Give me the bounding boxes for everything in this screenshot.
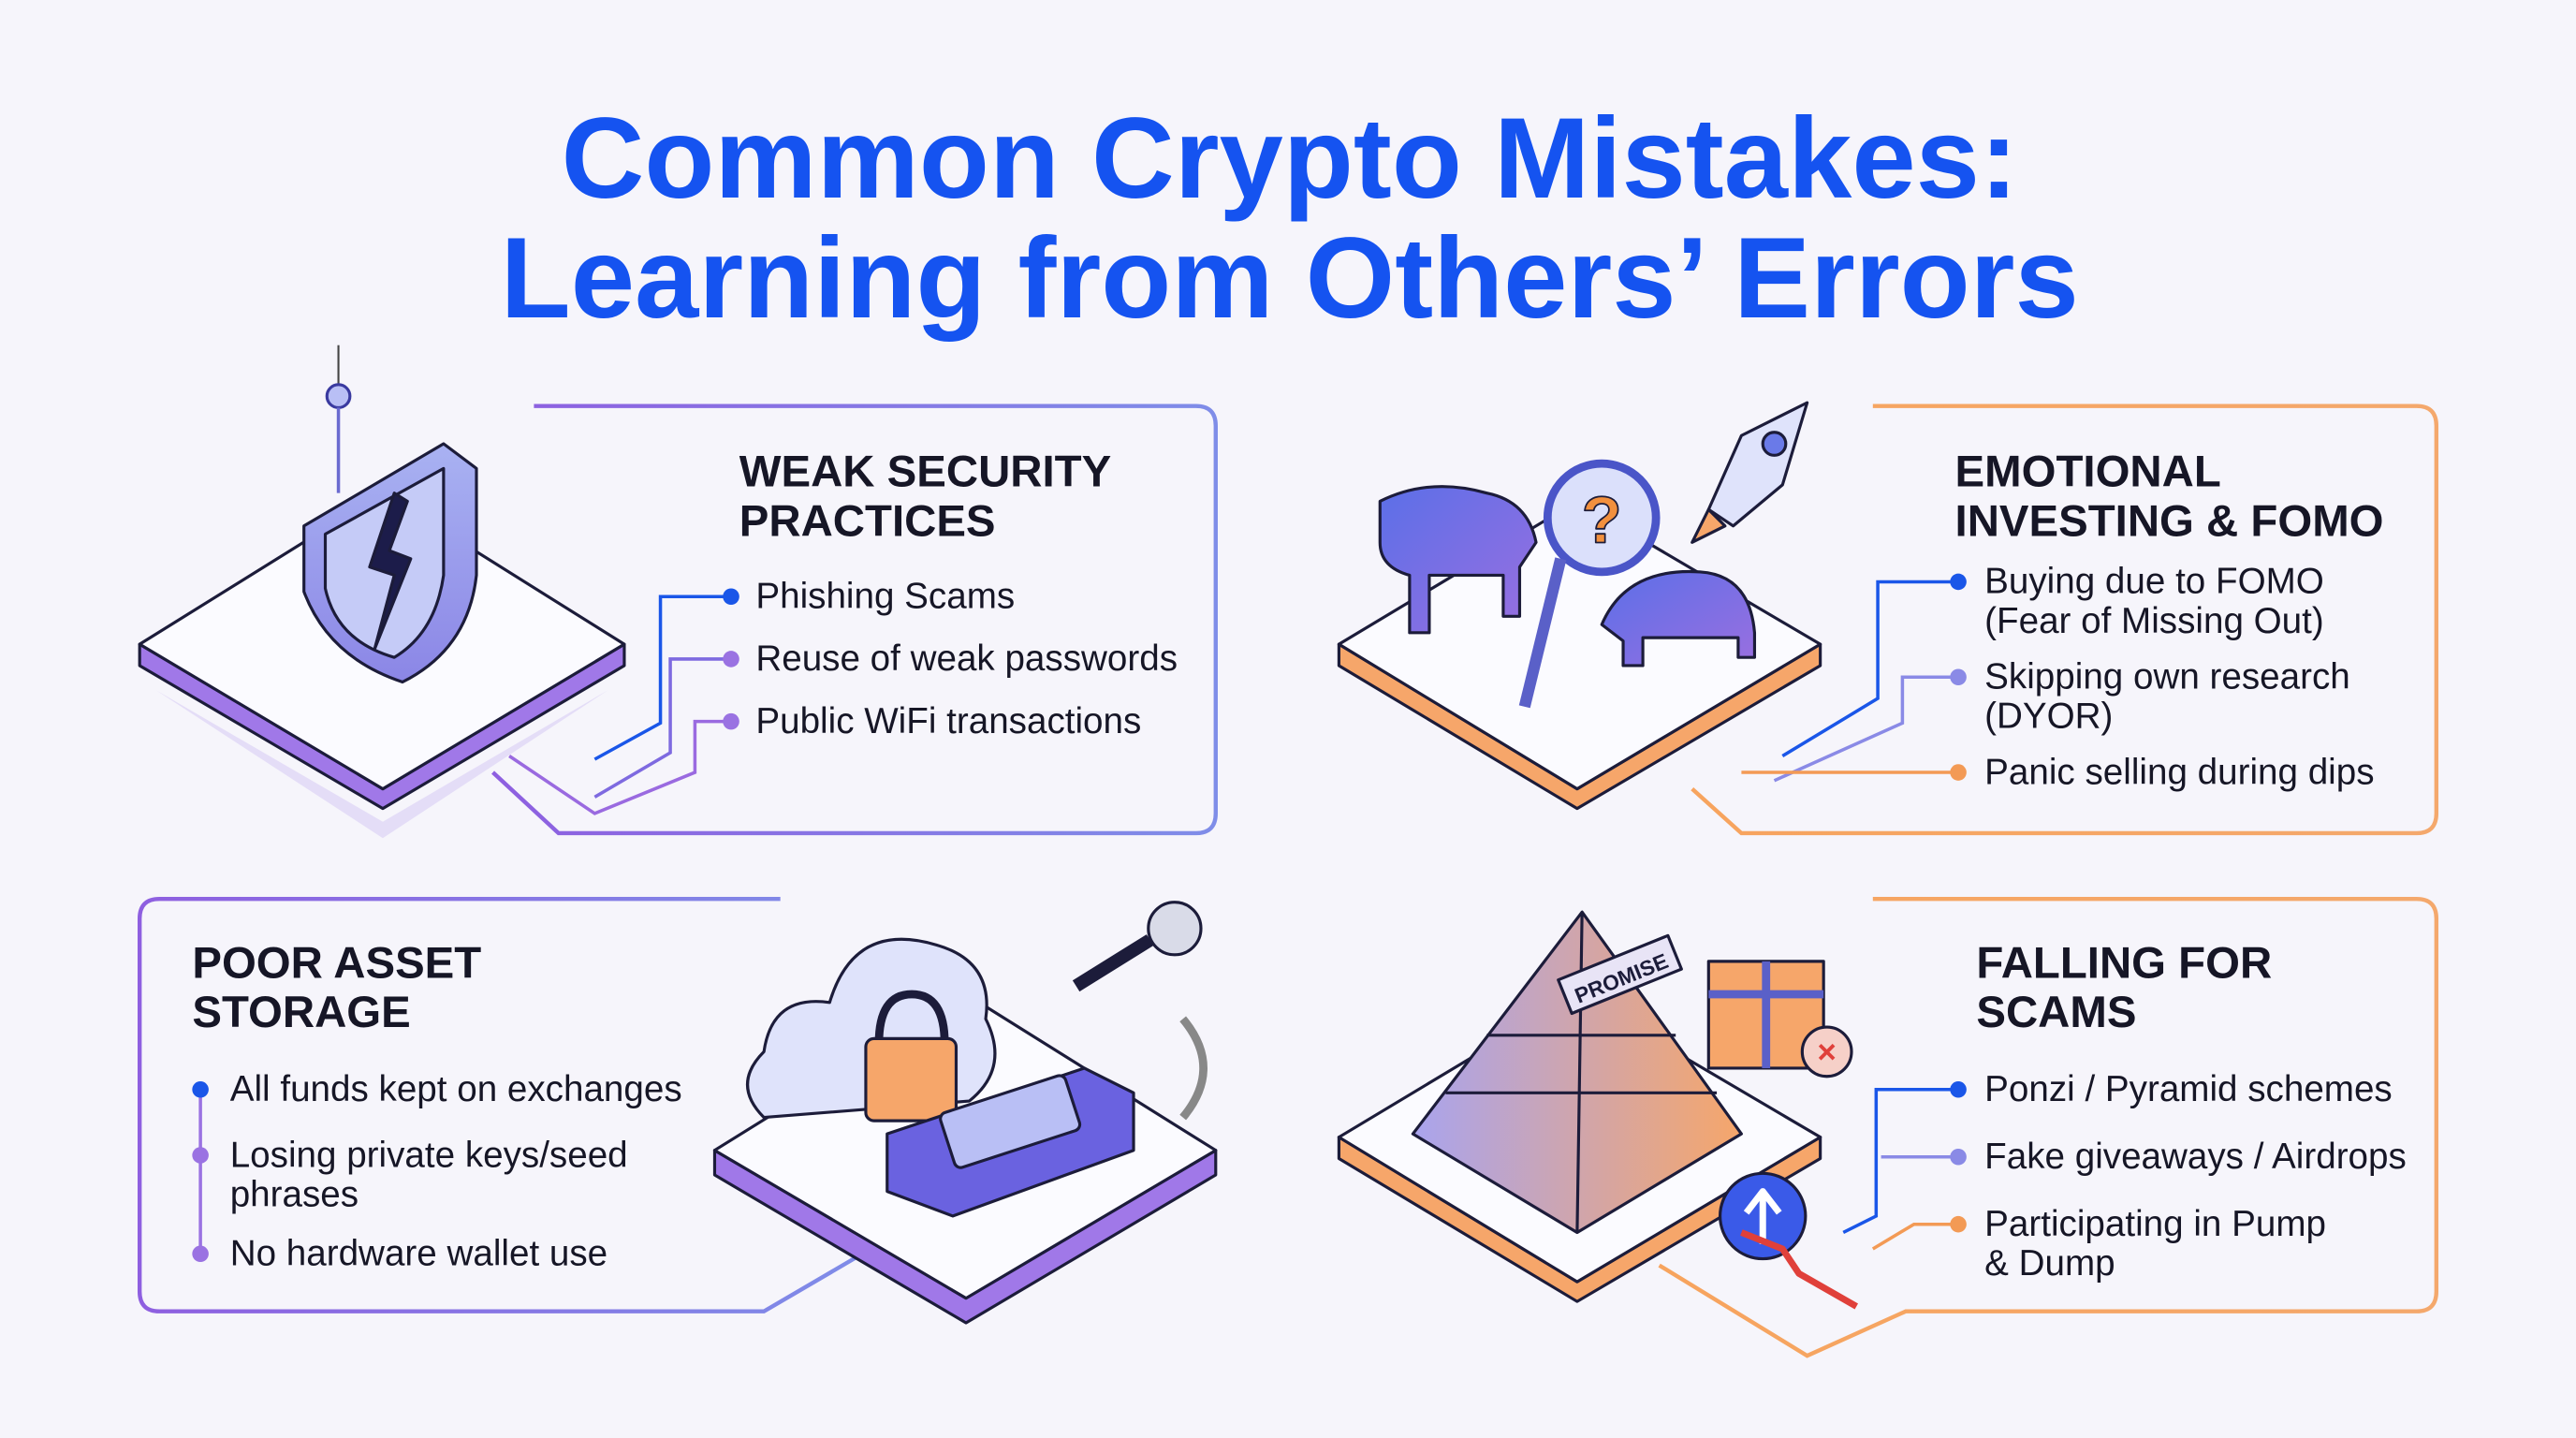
bullets: (DYOR) <box>1984 697 2113 737</box>
bullets: (Fear of Missing Out) <box>1984 601 2324 641</box>
heading: FALLING FOR <box>1976 938 2272 988</box>
bullets: Reuse of weak passwords <box>755 638 1178 679</box>
panel: weak security <box>139 345 1216 838</box>
panel: poor asset storage <box>139 899 1216 1323</box>
bullets: No hardware wallet use <box>230 1234 607 1274</box>
bullets: Phishing Scams <box>755 577 1015 617</box>
heading: INVESTING & FOMO <box>1955 496 2384 546</box>
bullets: Ponzi / Pyramid schemes <box>1984 1069 2393 1109</box>
bullets <box>1741 562 2375 792</box>
heading: EMOTIONAL <box>1955 448 2221 497</box>
heading: POOR ASSET <box>192 938 481 988</box>
bullets: Fake giveaways / Airdrops <box>1984 1137 2407 1177</box>
title: Learning from Others’ Errors <box>501 214 2079 343</box>
heading: STORAGE <box>192 988 411 1037</box>
heading: PRACTICES <box>739 496 996 546</box>
bullets: Skipping own research <box>1984 657 2350 697</box>
bullets: phrases <box>230 1174 359 1214</box>
heading <box>739 448 1111 546</box>
icon: platform bull bear magnifier rocket <box>1339 403 1821 809</box>
bullets: All funds kept on exchanges <box>230 1069 682 1109</box>
bullets: Buying due to FOMO <box>1984 562 2324 602</box>
bullets: Losing private keys/seed <box>230 1135 628 1175</box>
title <box>501 95 2079 343</box>
panel: emotional investing <box>1339 403 2437 833</box>
heading <box>192 938 481 1037</box>
title: Common Crypto Mistakes: <box>562 95 2018 223</box>
bullets <box>509 577 1178 814</box>
icon: platform cloud lock wallet key <box>714 902 1216 1323</box>
icon: platform pyramid gift arrow: PROMISE <box>1572 948 1672 1008</box>
bullets <box>1843 1069 2407 1284</box>
heading: WEAK SECURITY <box>739 448 1111 497</box>
heading <box>1976 938 2272 1037</box>
icon: platform with shield and hook <box>139 345 624 838</box>
bullets: & Dump <box>1984 1243 2115 1284</box>
bullets: Participating in Pump <box>1984 1204 2326 1244</box>
bullets: Public WiFi transactions <box>755 701 1141 741</box>
heading: SCAMS <box>1976 988 2136 1037</box>
icon: platform bull bear magnifier rocket: ? <box>1582 482 1622 556</box>
icon: platform pyramid gift arrow: × <box>1817 1034 1837 1071</box>
icon: platform pyramid gift arrow <box>1339 912 1856 1306</box>
heading <box>1955 448 2384 546</box>
bullets <box>192 1069 682 1274</box>
panel: falling for scams <box>1339 899 2437 1356</box>
bullets: Panic selling during dips <box>1984 752 2375 792</box>
